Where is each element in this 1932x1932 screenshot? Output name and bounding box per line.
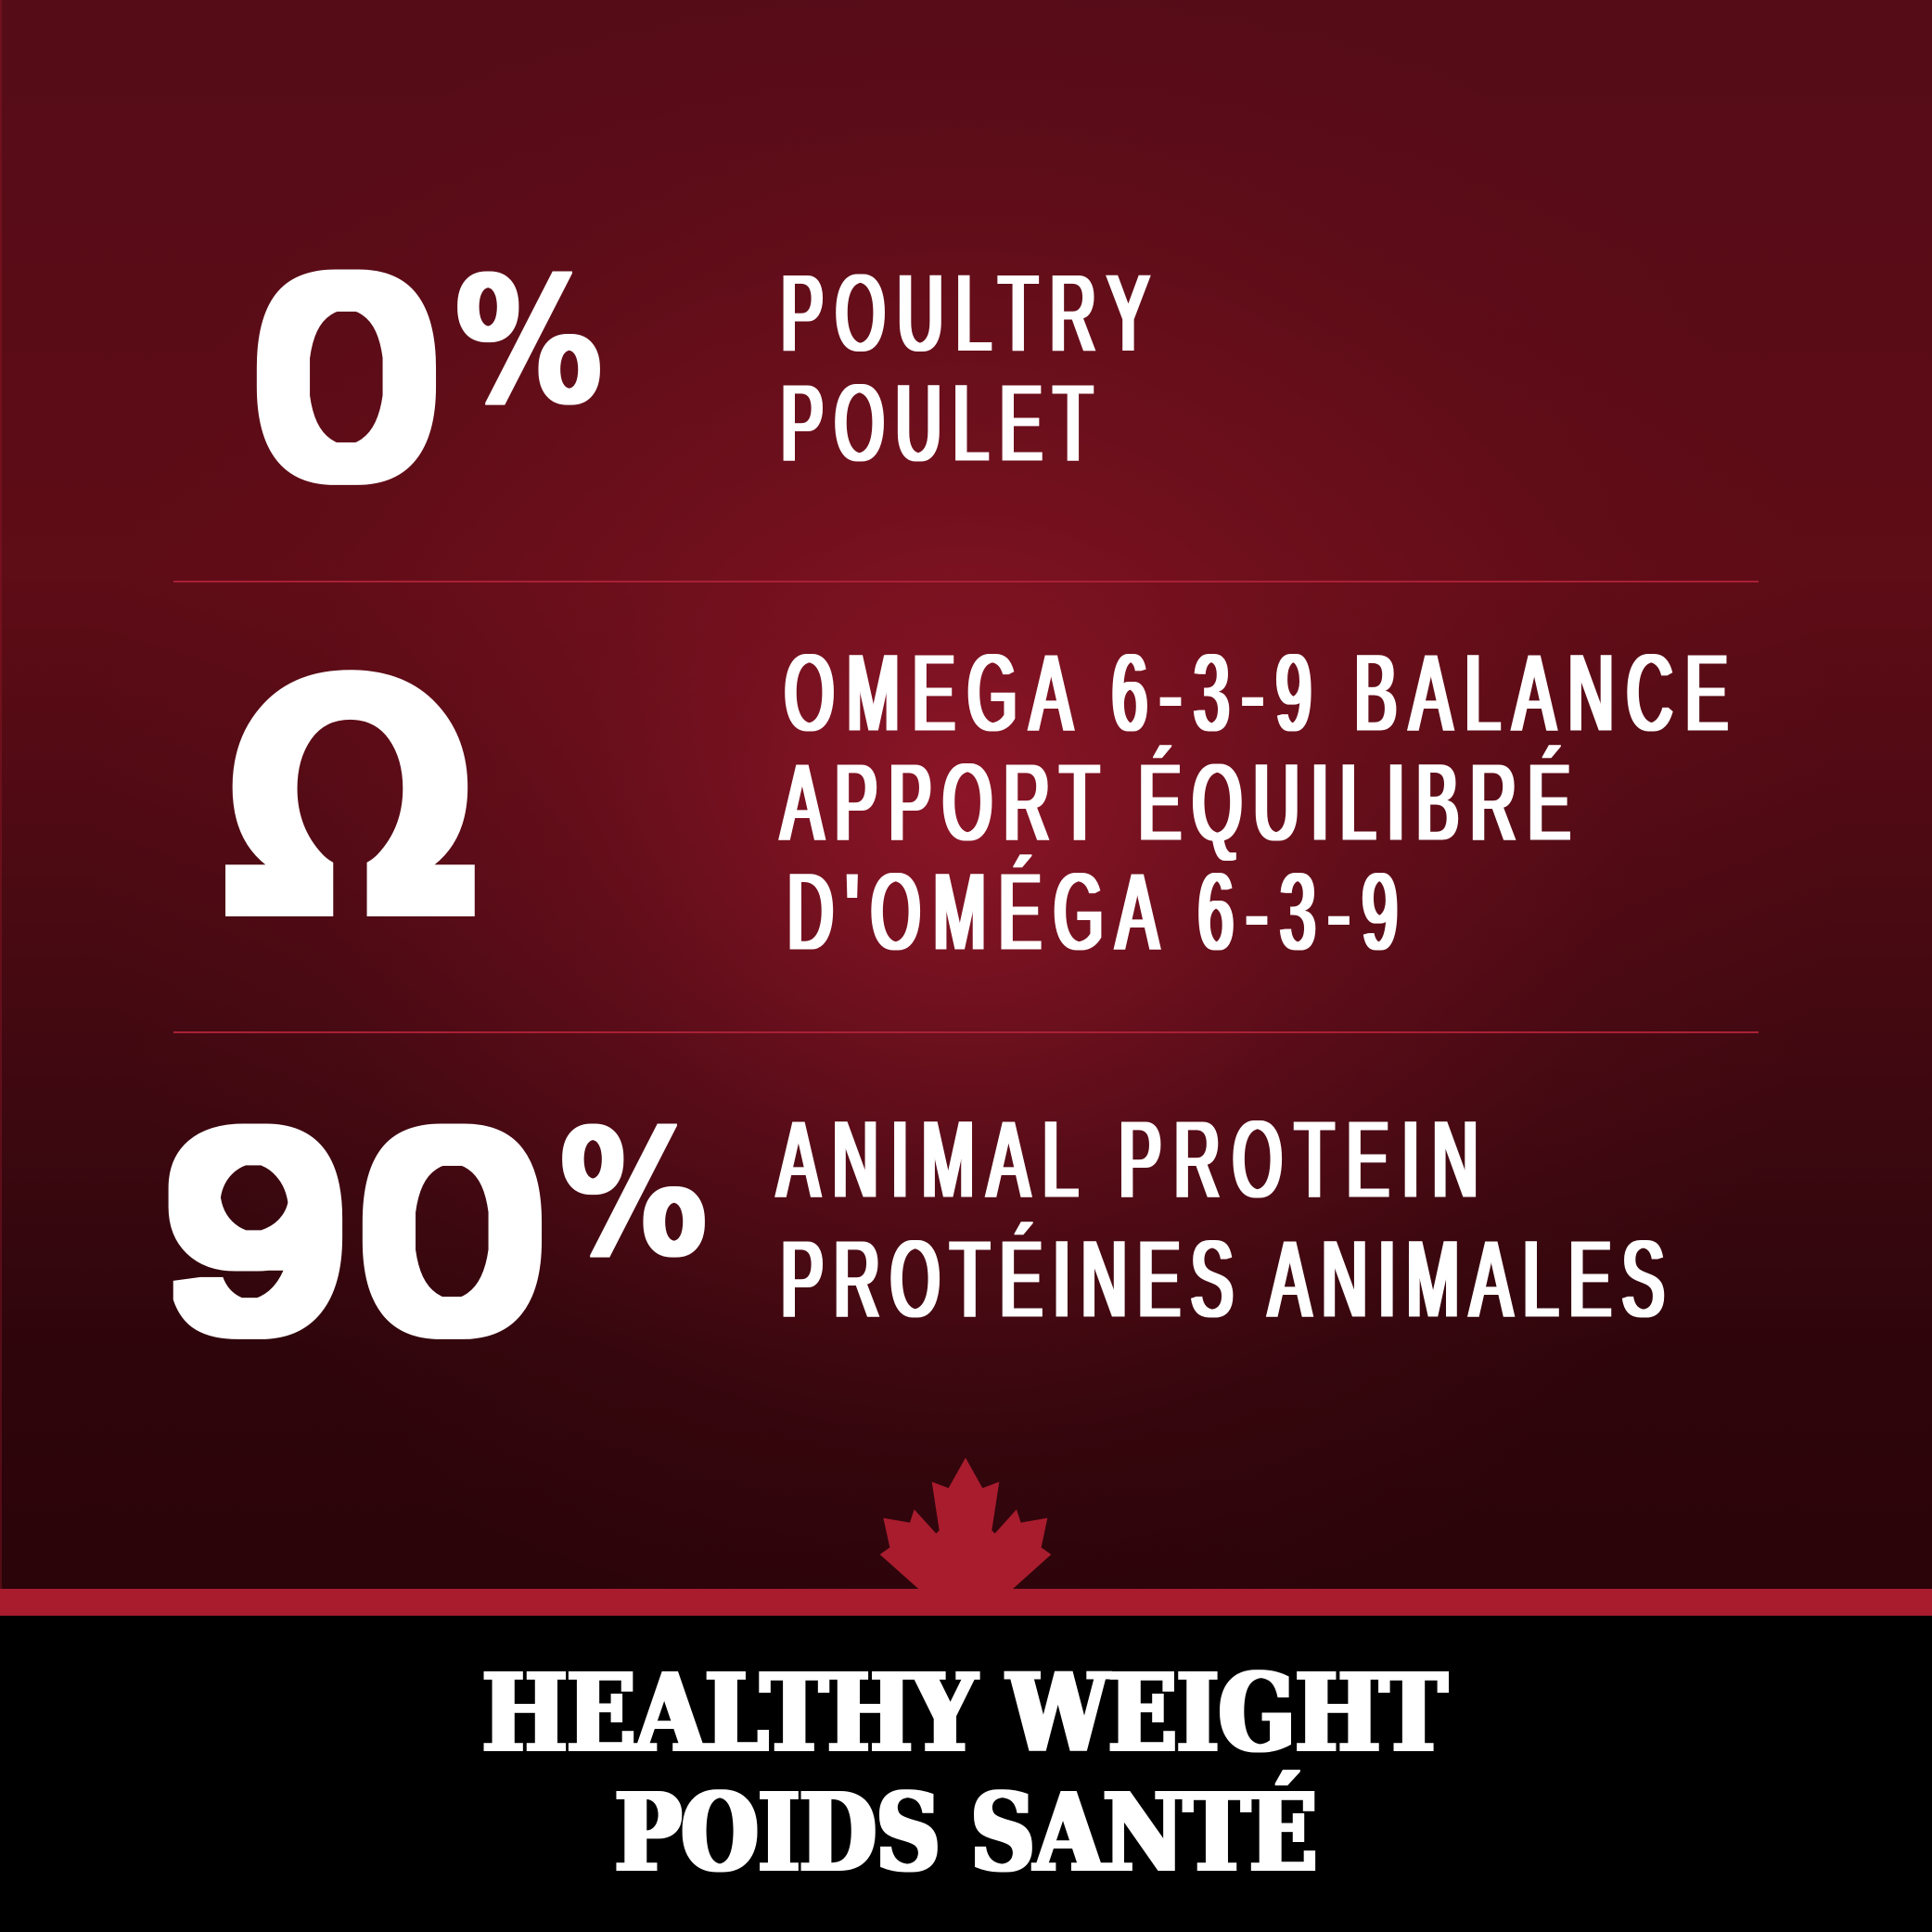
footer title: HEALTHY WEIGHT: [482, 1651, 1447, 1776]
row 2: omega balance: [220, 612, 1728, 991]
divider: [173, 1031, 1759, 1033]
big figure: 90%: [164, 1075, 708, 1387]
label: animal protein: PROTÉINES ANIMALES: [781, 1219, 1664, 1340]
row 3: 90% animal protein: [164, 1075, 1664, 1387]
red band: [0, 1589, 1932, 1616]
label: omega balance: [781, 633, 1728, 973]
big figure: 0%: %: [454, 240, 603, 443]
footer title: [482, 1651, 1447, 1896]
label: poultry / poulet: [781, 253, 1149, 484]
big figure: 0%: 0: [255, 221, 438, 532]
row 1: 0% poultry: [255, 221, 1149, 532]
divider: [173, 581, 1759, 582]
big figure: 0%: [255, 221, 603, 532]
label: omega balance: OMEGA 6-3-9 BALANCE: [785, 633, 1728, 754]
label: omega balance: APPORT ÉQUILIBRÉ: [781, 742, 1570, 864]
label: animal protein: [777, 1099, 1664, 1340]
big figure: 90%: 9: [164, 1075, 347, 1387]
label: poultry / poulet: POULET: [781, 363, 1093, 484]
icon: maple leaf: [880, 1458, 1051, 1593]
icon: omega symbol: Ω: [220, 612, 480, 991]
label: omega balance: D'OMÉGA 6-3-9: [787, 851, 1398, 973]
big figure: 90%: 0: [361, 1075, 544, 1387]
label: animal protein: ANIMAL PROTEIN: [777, 1099, 1478, 1221]
footer panel: [0, 1616, 1932, 1932]
footer title: POIDS SANTÉ: [615, 1771, 1317, 1896]
big figure: 90%: %: [559, 1093, 708, 1296]
label: poultry / poulet: POULTRY: [781, 253, 1149, 375]
